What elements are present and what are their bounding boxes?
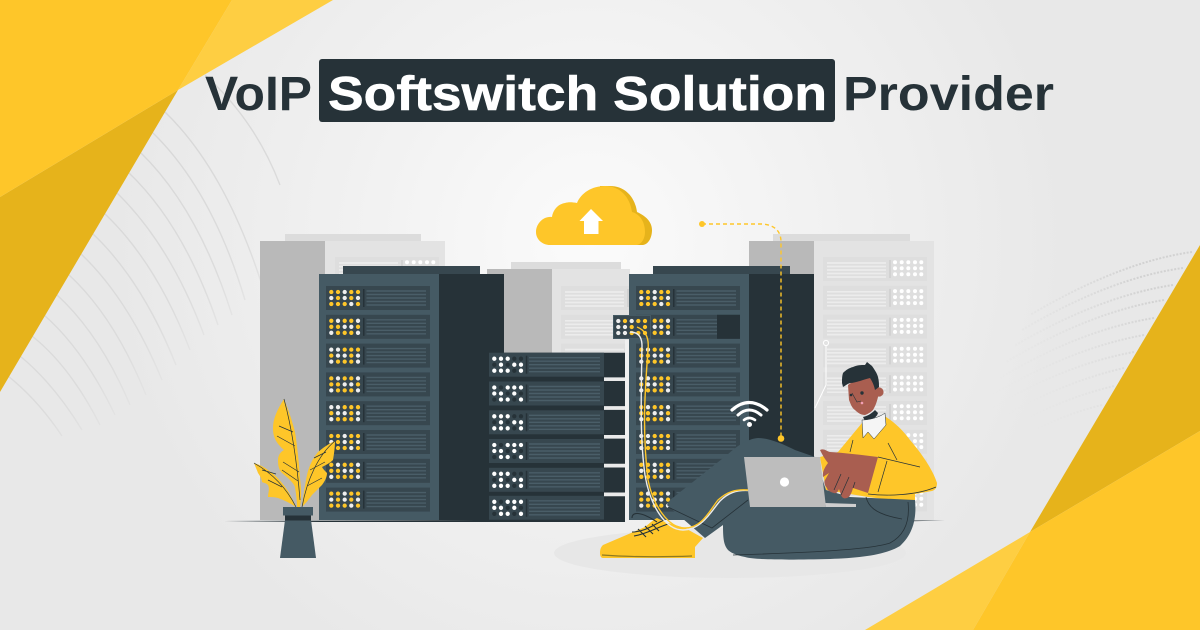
person: shoe xyxy=(600,513,703,558)
floor line xyxy=(224,520,945,522)
plant pot xyxy=(280,507,316,558)
person: head xyxy=(842,362,884,415)
person: neck xyxy=(863,410,878,421)
icon: cloud upload xyxy=(536,186,652,245)
person xyxy=(600,327,937,560)
background arcs: right xyxy=(974,252,1192,466)
dashed data wire xyxy=(699,221,784,442)
cables xyxy=(630,327,748,530)
person: sweater xyxy=(820,417,937,503)
title highlight box xyxy=(319,59,835,122)
person: laptop xyxy=(744,457,856,507)
person: arm and hand xyxy=(820,440,936,498)
plant leaves xyxy=(254,399,335,507)
plant xyxy=(254,399,335,558)
main server rack: right xyxy=(613,266,814,520)
title xyxy=(205,59,1054,122)
back server rack: left xyxy=(260,234,445,520)
corner shape: top left xyxy=(0,0,333,392)
back server rack: middle xyxy=(487,262,665,368)
background arcs: left xyxy=(8,75,280,436)
title: Softswitch Solution: Softswitch Solution xyxy=(328,68,827,121)
pulled-out server panel xyxy=(613,315,651,339)
floor shadow xyxy=(554,528,906,578)
middle front server rack xyxy=(489,353,625,520)
title: Provider: Provider xyxy=(843,68,1054,121)
main server rack: left xyxy=(319,266,504,520)
title: VoIP: VoIP xyxy=(205,68,312,121)
corner shape: bottom right xyxy=(865,245,1200,630)
icon: wifi xyxy=(732,402,767,426)
person: collar xyxy=(862,413,886,439)
back server rack: right xyxy=(749,234,934,520)
person: trousers xyxy=(667,438,915,560)
